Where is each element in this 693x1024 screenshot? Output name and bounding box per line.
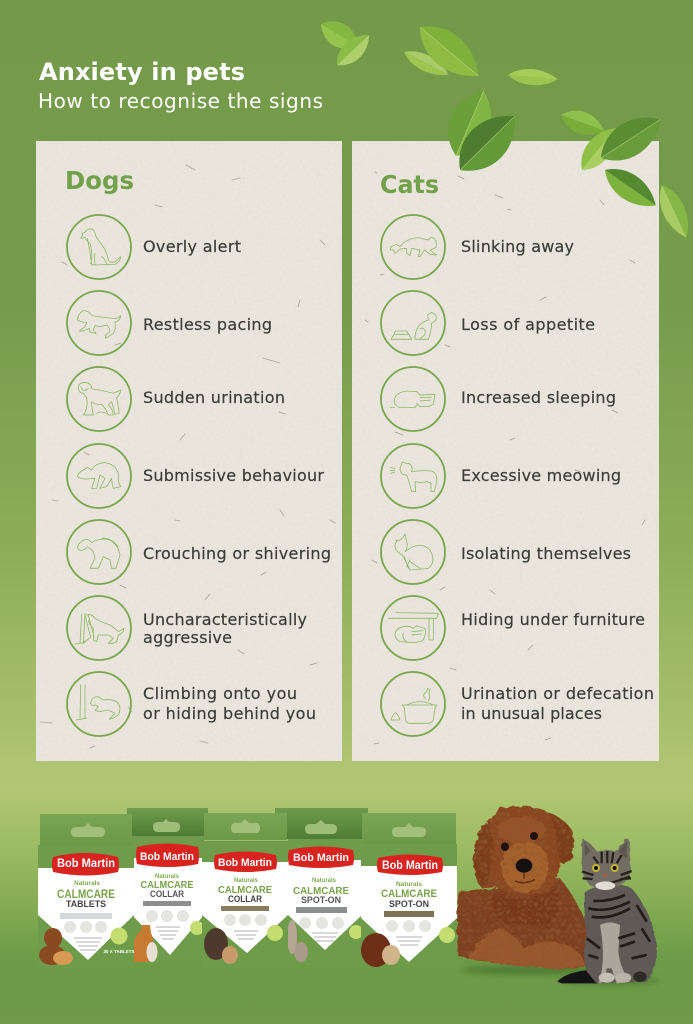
product: spot-on for cats: Bob Martin [293, 852, 349, 864]
product: collar for cats: Naturals [155, 874, 180, 880]
label: climbing onto you or hiding behind you: Climbing onto you [143, 684, 297, 703]
product: spot-on for cats: Naturals [312, 878, 337, 884]
product: spot-on for dogs [361, 813, 457, 969]
item: uncharacteristically aggressive [67, 596, 131, 660]
label: overly alert: Overly alert [143, 237, 241, 256]
label: urination or defecation in unusual places [461, 684, 654, 723]
item: increased sleeping [381, 367, 445, 431]
product: collar for dogs: Bob Martin [218, 857, 272, 869]
product: collar for cats: COLLAR [150, 889, 184, 899]
label: crouching or shivering: Crouching or shivering [143, 544, 331, 563]
panel: dogs [36, 141, 342, 761]
product: tablets: CALMCARE [57, 889, 115, 901]
item: isolating themselves [381, 520, 445, 584]
product: tablets: Naturals [74, 880, 100, 887]
label: urination or defecation in unusual places: Urination or defecation [461, 684, 654, 703]
product: collar for dogs: Naturals [234, 878, 259, 884]
item: overly alert [67, 215, 131, 279]
product: collar for dogs [202, 813, 288, 969]
label: hiding under furniture: Hiding under furniture [461, 610, 645, 629]
item: climbing onto you or hiding behind you [67, 672, 131, 736]
label: restless pacing: Restless pacing [143, 315, 272, 334]
leaves [315, 14, 693, 242]
product: spot-on for cats: SPOT-ON [301, 895, 341, 905]
product: collar for cats: CALMCARE [140, 879, 194, 891]
heading: Dogs: Dogs [65, 166, 134, 195]
product: collar for dogs: CALMCARE [218, 884, 272, 896]
item: urination or defecation in unusual places [381, 672, 445, 736]
product: tablets: 30 X TABLETS [104, 949, 134, 954]
item: loss of appetite [381, 291, 445, 355]
label: urination or defecation in unusual places: in unusual places [461, 704, 602, 723]
title: Anxiety in pets [39, 58, 245, 86]
label: uncharacteristically aggressive: aggressive [143, 628, 232, 647]
label: slinking away: Slinking away [461, 237, 574, 256]
photo: dog [457, 806, 598, 975]
item: excessive meowing [381, 444, 445, 508]
label: submissive behaviour: Submissive behaviour [143, 466, 324, 485]
product: spot-on for dogs: SPOT-ON [389, 899, 429, 910]
item: submissive behaviour [67, 444, 131, 508]
product: spot-on for dogs: CALMCARE [381, 888, 437, 900]
product: tablets: TABLETS [66, 899, 106, 910]
label: uncharacteristically aggressive: Uncharacteristically [143, 610, 307, 629]
item: slinking away [381, 215, 445, 279]
photo: cat [557, 838, 660, 985]
product: spot-on for cats: CALMCARE [293, 885, 349, 897]
product: spot-on for dogs: Naturals [396, 881, 422, 888]
title [38, 58, 323, 113]
label: uncharacteristically aggressive [143, 610, 307, 647]
product: collar for cats [127, 808, 208, 963]
product: tablets [38, 814, 134, 968]
label: climbing onto you or hiding behind you [143, 684, 316, 723]
product: spot-on for dogs: Bob Martin [382, 860, 438, 872]
label: isolating themselves: Isolating themselves [461, 544, 631, 563]
product: tablets: Bob Martin [57, 856, 115, 870]
label: climbing onto you or hiding behind you: or hiding behind you [143, 704, 316, 723]
item: sudden urination [67, 367, 131, 431]
cat eyes and nose [592, 864, 619, 878]
product: collar for dogs: COLLAR [228, 894, 262, 904]
item: restless pacing [67, 291, 131, 355]
item: crouching or shivering [67, 520, 131, 584]
product: spot-on for cats [275, 808, 368, 965]
label: excessive meowing: Excessive meowing [461, 466, 621, 485]
dog face [501, 832, 538, 883]
panel: cats [352, 141, 659, 761]
label: loss of appetite: Loss of appetite [461, 315, 595, 334]
subtitle: How to recognise the signs [38, 89, 323, 113]
product: collar for cats: Bob Martin [140, 851, 194, 863]
heading: Cats: Cats [380, 170, 439, 199]
label: sudden urination: Sudden urination [143, 388, 285, 407]
label: increased sleeping: Increased sleeping [461, 388, 616, 407]
item: hiding under furniture [381, 596, 445, 660]
